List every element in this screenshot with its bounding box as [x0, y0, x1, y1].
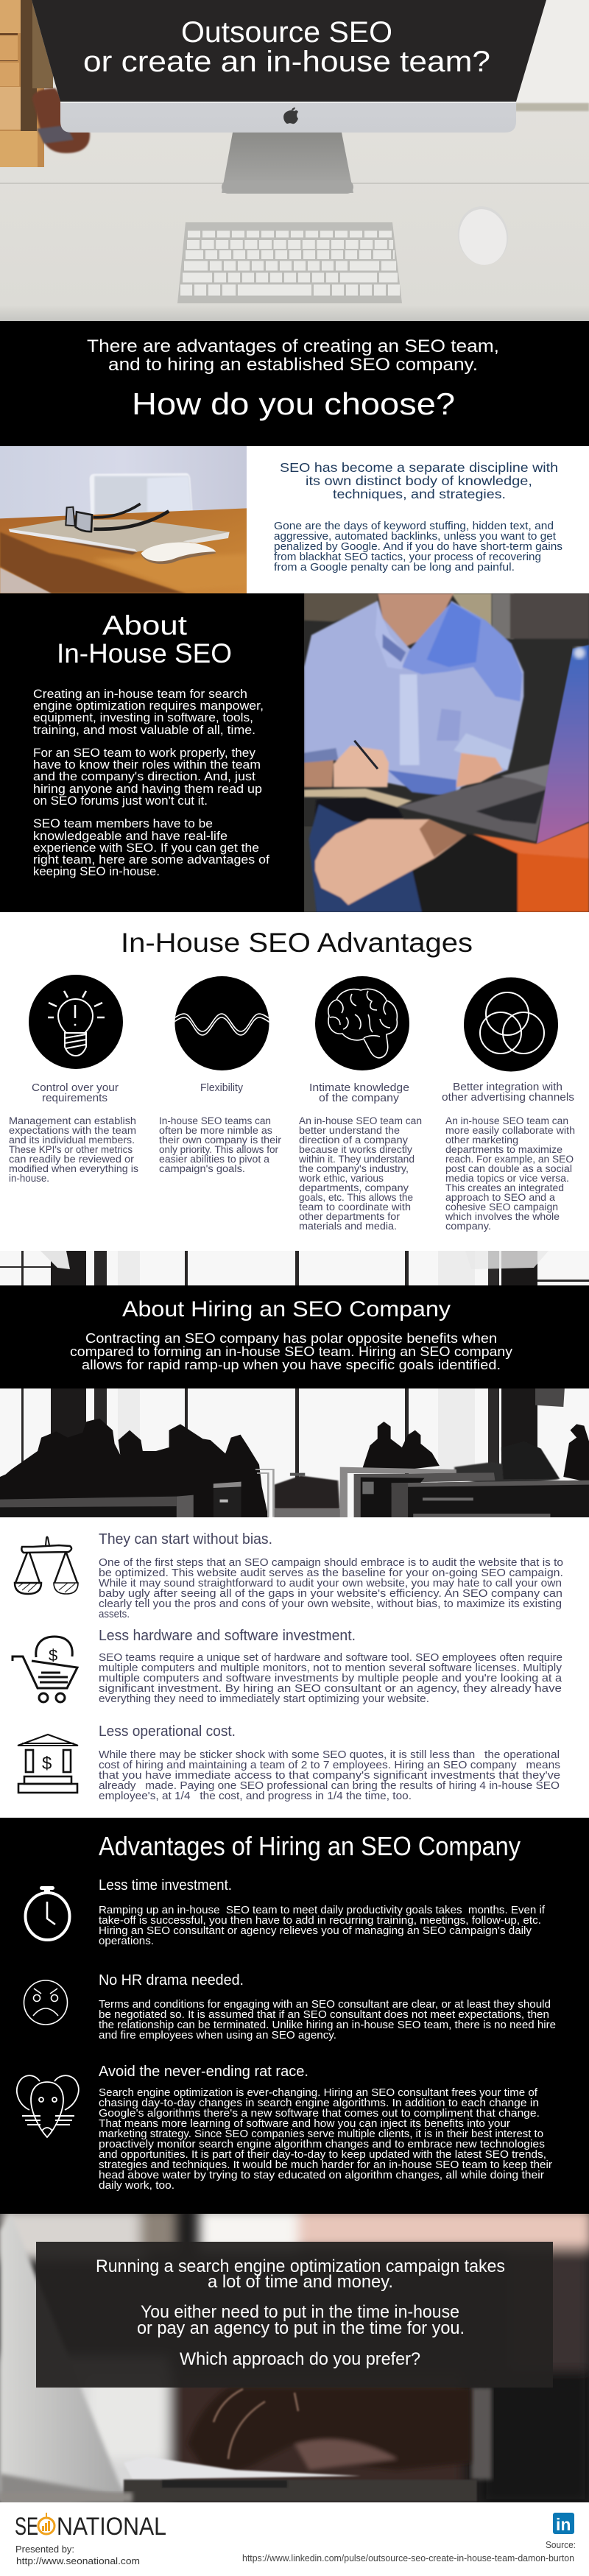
photo: hands typing on laptop	[0, 2209, 589, 2503]
text block: assets.	[99, 1609, 130, 1620]
text block: While it may sound straightforward to audit your own website, you may hate to call your own	[99, 1578, 562, 1589]
column title	[309, 1081, 409, 1104]
text block: from a Google penalty can be long and painful.	[274, 562, 515, 574]
item text: Google's algorithms there's a new software that comes out to compliment that change.	[99, 2108, 540, 2120]
icon: angry face	[24, 1980, 68, 2025]
column text: media topics or vice versa.	[445, 1173, 569, 1184]
column text: cohesive SEO campaign	[445, 1201, 558, 1213]
icon: overlapping circles	[464, 978, 558, 1072]
item text: marketing strategy. Since SEO companies serve multiple clients, it is in their best interest to	[99, 2128, 543, 2140]
heading: About	[102, 610, 188, 641]
intro text: There are advantages of creating an SEO team,	[87, 336, 499, 356]
column text: company.	[445, 1221, 491, 1232]
text block: experience with SEO. If you can get the	[33, 841, 259, 855]
panel: hero photo with title	[0, 0, 589, 321]
column text	[9, 1115, 138, 1184]
column text: which involves the whole	[445, 1211, 560, 1222]
column text: easier abilities to pivot a	[159, 1154, 270, 1165]
item text: daily work, too.	[99, 2180, 174, 2192]
callout: Which approach do you prefer?	[180, 2349, 420, 2369]
item: rat race	[17, 2064, 552, 2192]
heading: In-House SEO	[57, 638, 232, 668]
callout: or pay an agency to put in the time for you.	[137, 2318, 465, 2338]
item text	[99, 1905, 546, 1947]
column text: In-house SEO teams can	[159, 1115, 271, 1126]
callout heading: SEO has become a separate discipline with	[280, 460, 558, 475]
column title: Better integration with	[453, 1081, 562, 1093]
panel: advantages of hiring an SEO company	[0, 1818, 589, 2214]
item heading: No HR drama needed.	[99, 1972, 244, 1989]
text block: While there may be sticker shock with some SEO quotes, it is still less than the operational	[99, 1749, 560, 1761]
column text: and its individual members.	[9, 1135, 135, 1146]
text block: from blackhat SEO tactics, your process of recovering	[274, 551, 541, 563]
icon: LinkedIn: in	[556, 2515, 571, 2534]
photo: man with notebook and laptop	[304, 593, 589, 912]
text block: hiring anyone and having them read up	[33, 783, 262, 796]
text block: everything they need to immediately start optimizing your website.	[99, 1693, 429, 1705]
text block: have to know their roles within the team	[33, 758, 261, 772]
column: flexibility	[159, 976, 282, 1174]
intro text	[87, 336, 499, 375]
title: or create an in-house team?	[83, 46, 490, 78]
icon: apple logo	[283, 107, 298, 124]
item text: That means more learning of software and how you can inject its benefits into your	[99, 2118, 510, 2130]
text block: keeping SEO in-house.	[33, 865, 160, 878]
item text: be negotiated so. It is assumed that if an SEO consultant does not meet expectations, then	[99, 2009, 549, 2021]
column text: the company's industry,	[299, 1163, 409, 1174]
panel: less operational cost	[18, 1723, 560, 1802]
logo: SEO National: SE	[15, 2513, 38, 2541]
column title	[32, 1081, 119, 1104]
column text: modified when everything is	[9, 1163, 138, 1174]
column text	[445, 1115, 575, 1232]
presented by	[15, 2544, 140, 2566]
icon: bank	[18, 1735, 78, 1793]
text block: cost of hiring and maintaining a team of 2 to 7 employees. Hiring an SEO company means	[99, 1760, 560, 1771]
text block: multiple computers and multiple monitors, not to mention several software licenses. Multiply	[99, 1662, 562, 1674]
column text: departments to maximize	[445, 1144, 562, 1155]
text block	[33, 688, 269, 878]
column text: reach. For example, an SEO	[445, 1154, 574, 1165]
black band with text	[0, 1285, 589, 1388]
column: control over your requirements	[9, 975, 138, 1184]
column title: of the company	[319, 1092, 400, 1104]
column: better integration	[442, 978, 575, 1232]
column text: An in-house SEO team can	[445, 1115, 568, 1126]
column text: can readily be reviewed or	[9, 1154, 135, 1165]
text block: that you have immediate access to that company's significant investments that they've	[99, 1770, 560, 1782]
dollar sign: $	[49, 1646, 57, 1665]
text block: knowledgeable and have real-life	[33, 830, 228, 843]
text block: clearly tell you the pros and cons of your own website, without bias, to maximize its existing	[99, 1598, 562, 1610]
column text: An in-house SEO team can	[299, 1115, 422, 1126]
text block: aggressive, automated backlinks, unless you want to get	[274, 531, 556, 543]
callout: You either need to put in the time in-house	[141, 2302, 459, 2322]
panel: in-house SEO advantages	[9, 928, 575, 1232]
text block: right team, here are some advantages of	[33, 853, 269, 867]
heading: About Hiring an SEO Company	[122, 1297, 451, 1321]
text block: engine optimization requires manpower,	[33, 699, 264, 713]
column text: other marketing	[445, 1135, 518, 1146]
text block: One of the first steps that an SEO campaign should embrace is to audit the website that is to	[99, 1557, 563, 1569]
column text: expectations with the team	[9, 1125, 136, 1136]
photo: silhouettes in office	[0, 1251, 589, 1517]
photo: desk with computer, keyboard and mouse	[0, 0, 589, 321]
text block: and the company's direction. And, just	[33, 770, 255, 783]
icon: shopping cart with coin	[13, 1637, 77, 1702]
source: Source:	[546, 2539, 576, 2550]
icon: light bulb	[29, 975, 123, 1069]
text block: penalized by Google. And if you do have short-term gains	[274, 541, 562, 553]
callout heading	[280, 460, 558, 501]
column text: direction of a company	[299, 1135, 408, 1146]
photo: glasses on laptop	[0, 446, 247, 593]
column text: in-house.	[9, 1173, 49, 1184]
source	[242, 2539, 576, 2563]
logo: SEO National	[15, 2513, 166, 2541]
item text: the relationship can be terminated. Unlike hiring an in-house SEO team, there is no need hire	[99, 2019, 556, 2031]
text block: compared to forming an in-house SEO team. Hiring an SEO company	[70, 1344, 513, 1359]
column: intimate knowledge	[298, 976, 422, 1232]
item text: proactively monitor search engine algorithm changes and to embrace new technologies	[99, 2139, 545, 2150]
callout: a lot of time and money.	[208, 2272, 393, 2292]
column title: Flexibility	[200, 1081, 243, 1094]
panel: closing photo with callout	[0, 2209, 589, 2503]
item: less time investment	[25, 1877, 546, 1947]
panel: about in-house SEO	[0, 593, 589, 912]
column title: Control over your	[32, 1081, 119, 1094]
item: no HR drama	[24, 1972, 556, 2042]
text block: SEO team members have to be	[33, 817, 213, 830]
icon: scales	[15, 1537, 78, 1594]
column text: team to coordinate with	[299, 1201, 411, 1213]
item heading: Avoid the never-ending rat race.	[99, 2064, 308, 2080]
panel: how do you choose	[0, 321, 589, 446]
item text	[99, 1999, 556, 2042]
text block: multiple computers and software investments by multiple people and you're looking at a	[99, 1673, 562, 1684]
heading: Advantages of Hiring an SEO Company	[99, 1831, 521, 1861]
text block: employee's, at 1/4 the cost, and progress in 1/4 the time, too.	[99, 1790, 412, 1802]
title: Outsource SEO	[181, 16, 392, 49]
text block	[99, 1749, 560, 1802]
callout: Running a search engine optimization campaign takes	[96, 2256, 505, 2276]
callout heading: techniques, and strategies.	[333, 487, 506, 501]
item text: Hiring an SEO consultant or agency relieves you of managing an SEO campaign's daily	[99, 1925, 532, 1937]
text block	[99, 1557, 563, 1620]
text block	[70, 1330, 513, 1372]
text block: already made. Paying one SEO professional can bring the results of hiring 4 in-house SEO	[99, 1780, 560, 1792]
item text: operations.	[99, 1935, 154, 1947]
heading: Less hardware and software investment.	[99, 1628, 356, 1644]
text block: be optimized. This website audit serves as the baseline for your on-going SEO campaign.	[99, 1567, 563, 1579]
column title: other advertising channels	[442, 1091, 574, 1104]
column text: because it works directly	[299, 1144, 412, 1155]
text block: Gone are the days of keyword stuffing, hidden text, and	[274, 521, 554, 532]
column title: requirements	[42, 1092, 107, 1104]
heading: Less operational cost.	[99, 1723, 236, 1740]
icon: bank: $	[42, 1754, 52, 1774]
item text: Terms and conditions for engaging with an SEO consultant are clear, or at least they should	[99, 1999, 551, 2011]
title	[83, 16, 490, 78]
column text: their own company is their	[159, 1135, 282, 1146]
heading	[57, 610, 232, 668]
logo: SEO National: NATIONAL	[57, 2513, 166, 2541]
panel: footer	[15, 2513, 576, 2566]
text block	[99, 1652, 562, 1705]
item text: and opportunities. It is part of their day-to-day to keep updated with the latest SEO trends,	[99, 2149, 546, 2161]
column text: other departments for	[299, 1211, 401, 1222]
column text: more easily collaborate with	[445, 1125, 575, 1136]
icon: LinkedIn	[553, 2513, 574, 2534]
text block: For an SEO team to work properly, they	[33, 747, 256, 760]
column title: Intimate knowledge	[309, 1081, 409, 1094]
item text: chasing day-to-day changes in search engine algorithms. In addition to each change in	[99, 2097, 539, 2109]
column text: often be more nimble as	[159, 1125, 272, 1136]
column text: This creates an integrated	[445, 1182, 564, 1193]
source: https://www.linkedin.com/pulse/outsource-seo-create-in-house-team-damon-burton	[242, 2552, 574, 2563]
heading: How do you choose?	[132, 387, 455, 421]
column text: Management can establish	[9, 1115, 136, 1126]
column text: only priority. This allows for	[159, 1144, 278, 1155]
column text: post can double as a social	[445, 1163, 572, 1174]
heading: They can start without bias.	[99, 1531, 272, 1548]
icon: brain	[315, 976, 409, 1070]
intro text: and to hiring an established SEO company.	[108, 355, 478, 375]
column text	[298, 1115, 422, 1232]
panel: about hiring an SEO company	[0, 1251, 589, 1517]
text block: training, and most valuable of all, time.	[33, 724, 255, 737]
item heading: Less time investment.	[99, 1877, 232, 1894]
column text: departments, company	[299, 1182, 409, 1193]
item text	[99, 2087, 552, 2192]
column text: goals, etc. This allows the	[299, 1192, 413, 1203]
text block: Contracting an SEO company has polar opposite benefits when	[85, 1330, 497, 1346]
icon: rat	[17, 2075, 79, 2137]
presented by: http://www.seonational.com	[16, 2555, 140, 2566]
item text: and fire employees when using an SEO agency.	[99, 2030, 336, 2042]
callout heading: its own distinct body of knowledge,	[306, 473, 532, 488]
column text: better understand the	[299, 1125, 400, 1136]
panel: without bias	[15, 1531, 563, 1620]
column text: materials and media.	[299, 1221, 397, 1232]
text block: baby ugly after seeing all of the gaps in your website's efficiency. An SEO company can	[99, 1588, 562, 1600]
column title	[442, 1081, 574, 1104]
text block: significant investment. By hiring an SEO consultant or an agency, they already have	[99, 1683, 562, 1695]
column text: campaign's goals.	[159, 1163, 245, 1174]
item text: head above water by trying to stay educated on algorithm changes, all while doing their	[99, 2170, 544, 2181]
panel: SEO discipline	[0, 446, 589, 593]
column text: approach to SEO and a	[445, 1192, 556, 1203]
item text: Ramping up an in-house SEO team to meet daily productivity goals takes months. Even if	[99, 1905, 546, 1916]
item text: strategies and techniques. It would be much harder for an in-house SEO team to keep their	[99, 2159, 552, 2171]
text block: Creating an in-house team for search	[33, 688, 247, 701]
callout	[36, 2242, 553, 2388]
panel: less hardware	[13, 1628, 562, 1705]
item text: Search engine optimization is ever-changing. Hiring an SEO consultant frees your time of	[99, 2087, 538, 2099]
presented by: Presented by:	[15, 2544, 74, 2555]
heading: In-House SEO Advantages	[121, 928, 473, 958]
column text: work ethic, various	[298, 1173, 384, 1184]
text block: allows for rapid ramp-up when you have specific goals identified.	[82, 1357, 501, 1372]
icon: wave	[171, 976, 272, 1070]
item text: take-off is successful, you then have to add in recurring training, meetings, follow-up, etc.	[99, 1915, 541, 1927]
text block	[274, 521, 562, 574]
text block: on SEO forums just won't cut it.	[33, 794, 208, 808]
icon: stopwatch	[25, 1886, 69, 1940]
column text: These KPI's or other metrics	[9, 1144, 133, 1155]
column text: within it. They understand	[298, 1154, 415, 1165]
text block: equipment, investing in software, tools,	[33, 711, 253, 724]
column text	[159, 1115, 282, 1174]
text block: SEO teams require a unique set of hardware and software tool. SEO employees often require	[99, 1652, 562, 1664]
